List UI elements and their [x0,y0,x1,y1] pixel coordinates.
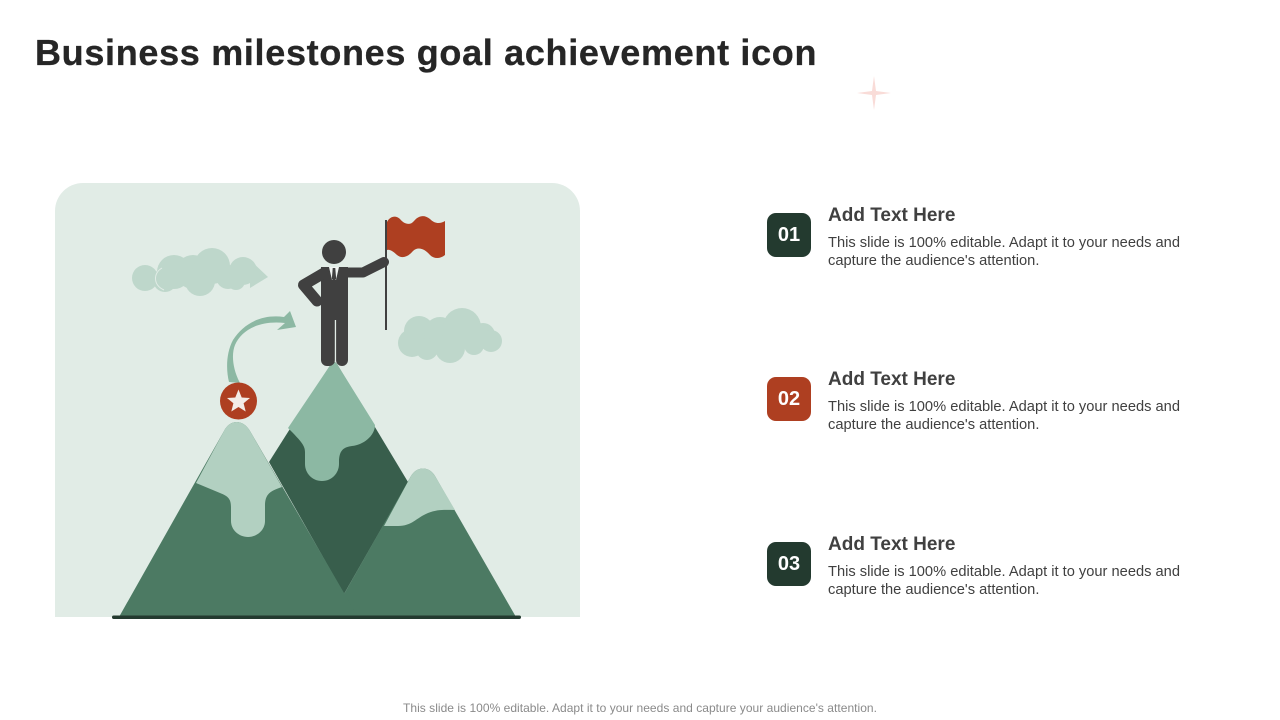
body 01: This slide is 100% editable. Adapt it to your needs and [828,235,1180,251]
mountain: centre peak [269,362,408,594]
icon: right cloud [398,308,502,363]
body 02: capture the audience's attention. [828,417,1039,433]
mountain: left snow cap [196,422,282,537]
mountain: left peak [119,422,358,617]
text block 02 [828,369,1180,433]
footer note: This slide is 100% editable. Adapt it to your needs and capture your audience's attention. [403,701,877,715]
icon: businessman [304,240,384,366]
heading 02: Add Text Here [828,369,955,390]
title: Business milestones goal achievement icon [35,32,817,73]
body 03 [828,564,1180,598]
badge 02: 02 [778,388,800,410]
body 01: capture the audience's attention. [828,253,1039,269]
mountain: right snow cap [384,468,455,526]
arrow: curved upward [227,311,296,383]
icon: star badge [220,382,257,420]
body 03: This slide is 100% editable. Adapt it to your needs and [828,564,1180,580]
body 03: capture the audience's attention. [828,582,1039,598]
heading 03: Add Text Here [828,534,955,555]
body 01 [828,235,1180,269]
icon: left cloud [132,248,268,296]
icon: flag [385,216,445,330]
body 02: This slide is 100% editable. Adapt it to your needs and [828,399,1180,415]
badge 02 [767,377,811,421]
heading 01: Add Text Here [828,205,955,226]
badge 01 [767,213,811,257]
badge 03: 03 [778,553,800,575]
body 02 [828,399,1180,433]
ground line [112,616,521,619]
badge 01: 01 [778,224,800,246]
panel: illustration background [55,183,580,617]
text block 03 [828,534,1180,598]
badge 03 [767,542,811,586]
mountain: right peak [331,468,516,617]
icon: sparkle [858,77,890,109]
mountain: centre snow cap [288,362,375,481]
text block 01 [828,205,1180,269]
